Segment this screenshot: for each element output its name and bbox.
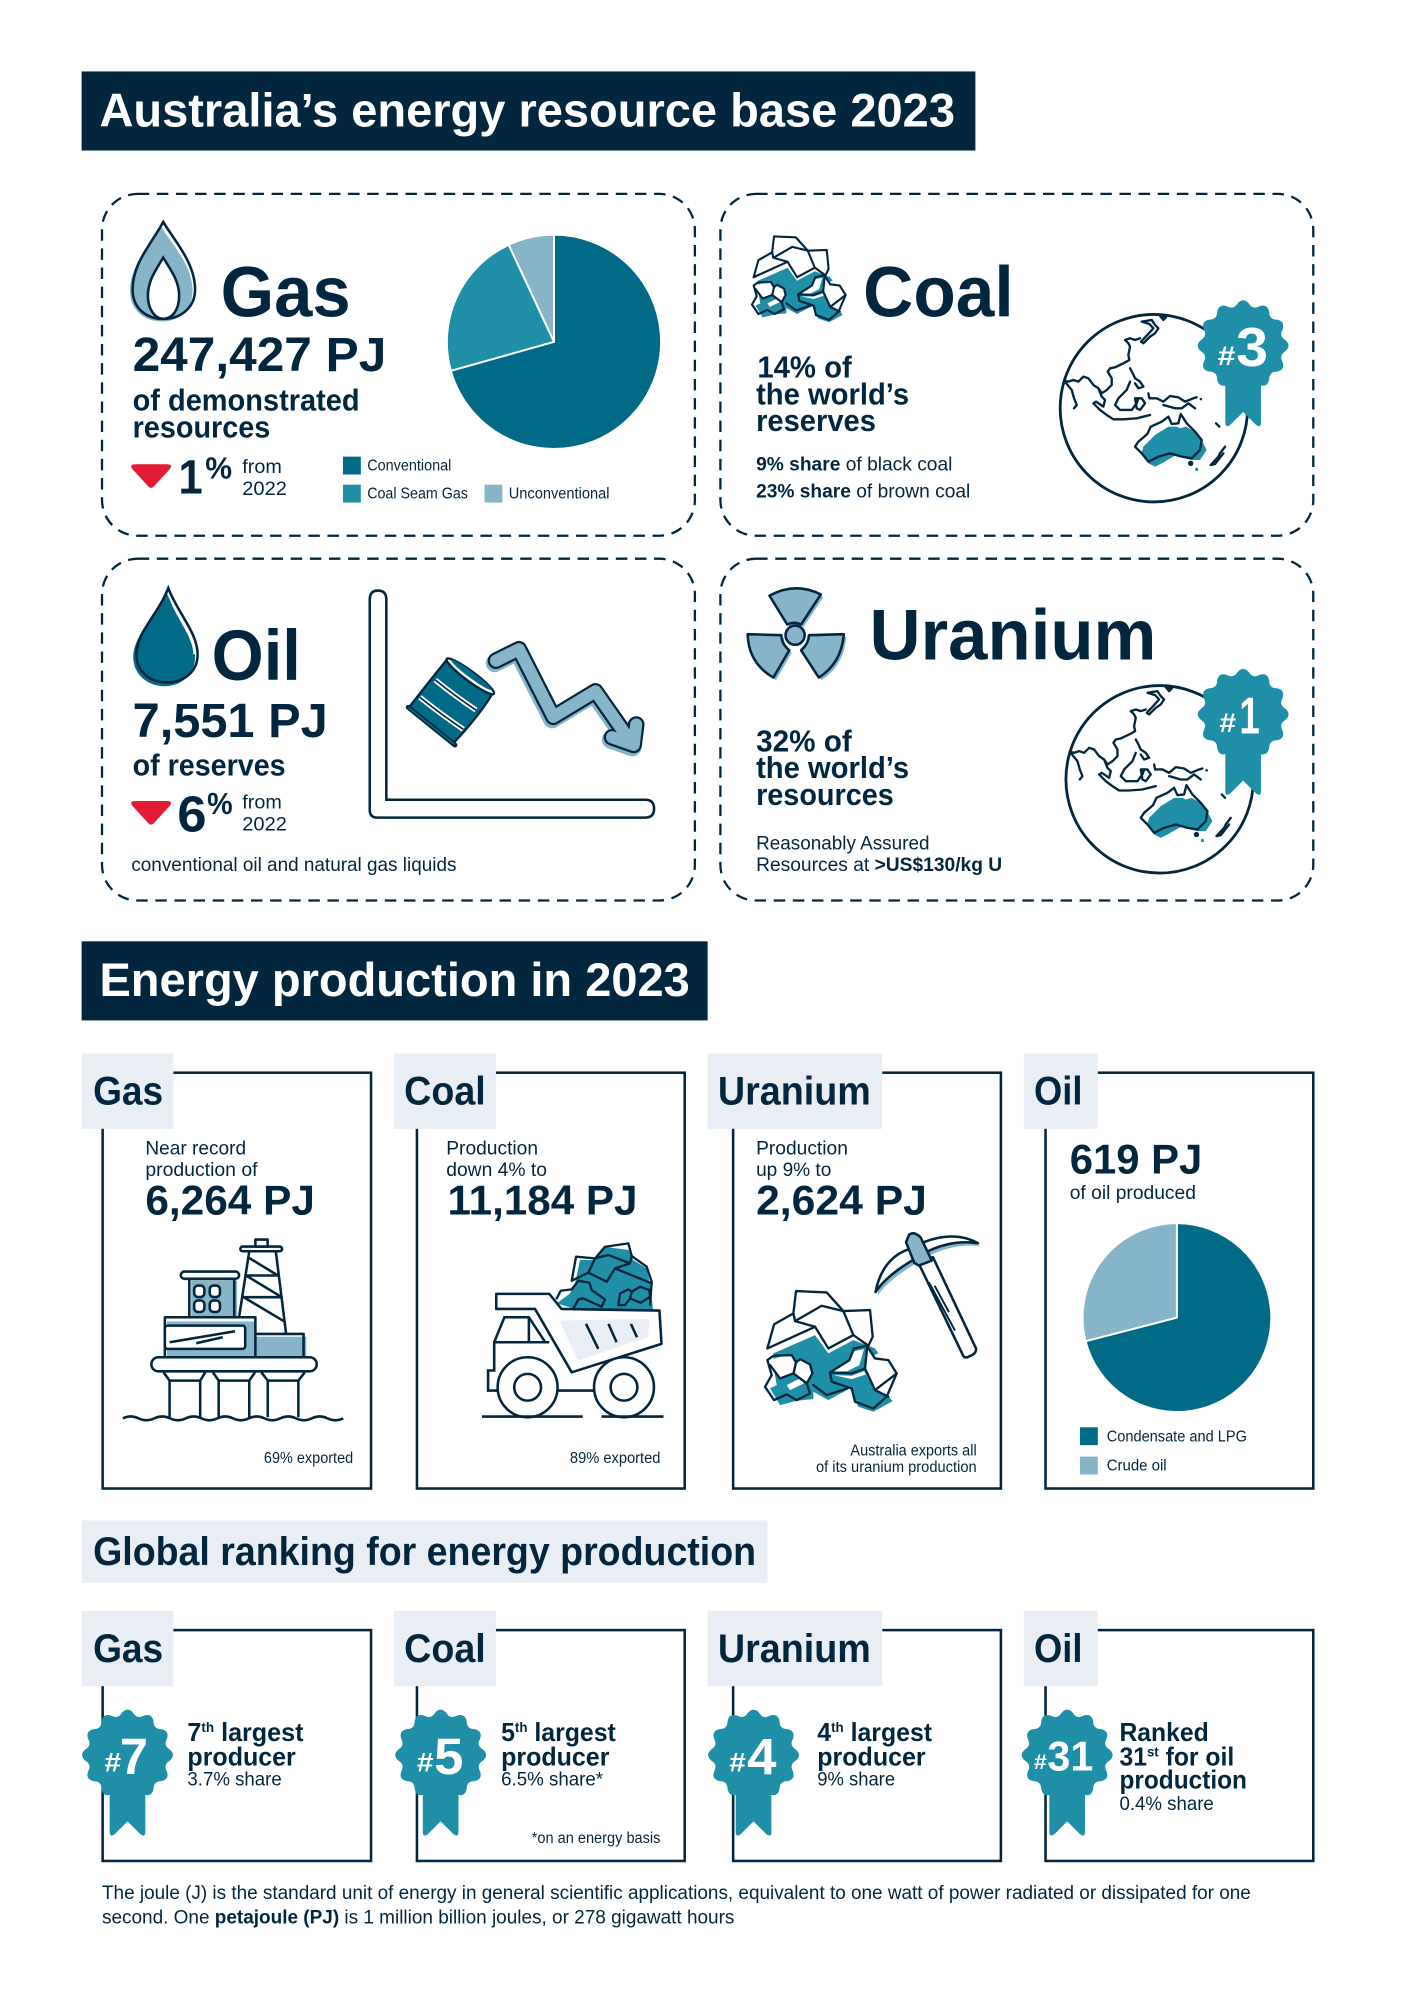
text: share of world resources: resources (756, 778, 894, 812)
chart: axes with falling arrow and barrel (370, 591, 654, 818)
text: reasonably assured resources: Resources at >US$130/kg U (756, 855, 1002, 876)
chart legend: Crude oil (1107, 1458, 1167, 1475)
tab: coal (394, 1054, 496, 1129)
text: gas rank: largest (214, 1717, 304, 1747)
text: production up 9 percent (756, 1137, 927, 1223)
text: share of world resources (756, 724, 909, 812)
text: exports note: Australia exports all (850, 1442, 977, 1459)
text: near record production: Near record (145, 1137, 246, 1159)
panel: gas ranking (82, 1611, 371, 1861)
text: uranium rank: producer (817, 1741, 926, 1771)
title: energy resource base (82, 71, 975, 151)
text: oil rank (1119, 1717, 1247, 1815)
badge: rank 3 (1198, 300, 1289, 426)
heading: global ranking (82, 1520, 768, 1583)
panel: gas production (82, 1054, 371, 1489)
stat: down 1 percent from 2022 (179, 451, 287, 505)
panel: oil ranking (1022, 1611, 1313, 1861)
badge: rank 31: 31 (1047, 1732, 1093, 1779)
text: of demonstrated resources: of demonstrated (133, 384, 360, 418)
stat: oil reserves: 7,551 PJ (133, 694, 328, 748)
chart legend: Conventional (367, 458, 451, 475)
text: exports note: of its uranium production (816, 1459, 977, 1476)
text: uranium rank (817, 1717, 932, 1791)
text: share of world reserves: reserves (756, 404, 876, 438)
text: uranium rank: 4 (817, 1717, 832, 1747)
chart legend (343, 457, 609, 503)
text: joule definition footnote (102, 1882, 1251, 1928)
text: oil rank: 31 (1119, 1741, 1149, 1771)
badge: rank 5 (395, 1710, 486, 1836)
tab: gas: Gas (93, 1627, 163, 1671)
text: production down 4 percent: 11,184 PJ (448, 1176, 638, 1223)
text: coal rank: th (515, 1719, 527, 1735)
text: coal rank: 5 (501, 1717, 516, 1747)
text: production down 4 percent (446, 1137, 638, 1223)
panel: coal reserves (720, 194, 1313, 536)
text: joule definition footnote: second. One petajoule (PJ) is 1 million billion joules, or 278 gigawatt hours (102, 1906, 735, 1928)
panel: coal production (394, 1054, 685, 1489)
tab: uranium (708, 1611, 882, 1686)
icon: globe (1060, 314, 1248, 502)
stat: down 1 percent from 2022: 2022 (242, 478, 287, 500)
chart legend: Coal Seam Gas (367, 486, 468, 503)
title: energy resource base: Australia’s energy resource base 2023 (99, 83, 955, 136)
text: oil rank: Ranked (1119, 1717, 1209, 1747)
badge: rank 5: 5 (434, 1728, 463, 1785)
panel: oil reserves (102, 559, 695, 901)
text: oil rank: production (1119, 1764, 1247, 1794)
text: gas rank: 3.7% share (187, 1769, 282, 1791)
pie chart: oil production (1083, 1223, 1271, 1412)
icon: oil drop (133, 588, 198, 686)
heading: oil: Oil (212, 616, 301, 696)
text: oil produced: 619 PJ (1070, 1135, 1202, 1182)
stat: down 6 percent from 2022: from (242, 792, 282, 814)
chart legend: Unconventional (509, 486, 609, 503)
panel: uranium ranking (708, 1611, 1001, 1861)
chart legend: Condensate and LPG (1107, 1428, 1247, 1445)
panel: coal ranking (394, 1611, 685, 1861)
tab: uranium (708, 1054, 882, 1129)
text: of demonstrated resources: resources (133, 410, 270, 445)
text: share of world reserves: 14% of (757, 351, 852, 385)
text: 69 percent exported: 69% exported (264, 1450, 353, 1467)
icon: oil barrel (408, 655, 497, 745)
tab: oil: Oil (1034, 1070, 1082, 1114)
badge: rank 1: # (1220, 708, 1236, 738)
icon: red down arrow (131, 801, 171, 825)
tab: oil (1024, 1611, 1098, 1686)
tab: gas (82, 1054, 173, 1129)
text: production up 9 percent: up 9% to (756, 1159, 831, 1181)
heading: global ranking: Global ranking for energy production (93, 1530, 756, 1574)
badge: rank 1: 1 (1239, 687, 1260, 745)
text: reasonably assured resources: Reasonably Assured (756, 833, 929, 854)
text: coal rank: 6.5% share* (501, 1769, 603, 1791)
badge: rank 3: 3 (1236, 316, 1268, 378)
arrow: falling trend (495, 649, 636, 747)
title: energy production: Energy production in 2023 (99, 953, 690, 1006)
text: production down 4 percent: Production (446, 1137, 538, 1159)
text: near record production: 6,264 PJ (145, 1176, 315, 1223)
text: share of world resources: the world’s (756, 751, 909, 785)
badge: rank 7 (82, 1710, 173, 1836)
badge: rank 1 (1198, 669, 1289, 795)
text: joule definition footnote: The joule (J) is the standard unit of energy in general scientific applications, equivalent to one watt of power radiated or dissipated for one (102, 1882, 1251, 1904)
text: uranium rank: largest (844, 1717, 932, 1747)
tab: uranium: Uranium (718, 1627, 871, 1671)
badge: rank 7: # (105, 1748, 121, 1778)
panel: gas resources (102, 194, 695, 536)
chart legend (1080, 1427, 1247, 1475)
badge: rank 5: # (417, 1748, 434, 1778)
badge: rank 4: 4 (747, 1728, 777, 1785)
pie chart: gas resources (447, 235, 661, 449)
text: oil rank: 0.4% share (1119, 1793, 1214, 1815)
stat: down 1 percent from 2022: from (242, 456, 282, 478)
text: black and brown coal share: 23% share of brown coal (756, 480, 970, 502)
text: gas rank: producer (187, 1741, 296, 1771)
heading: uranium: Uranium (870, 595, 1156, 675)
tab: coal: Coal (404, 1070, 486, 1114)
icon: offshore gas platform (123, 1240, 343, 1420)
text: of reserves: of reserves (133, 749, 286, 783)
text: 89 percent exported: 89% exported (570, 1450, 660, 1467)
badge: rank 4: # (729, 1748, 746, 1778)
title: energy production (82, 941, 708, 1020)
badge: rank 7: 7 (120, 1728, 148, 1785)
icon: coal dump truck (482, 1243, 664, 1417)
badge: rank 31: # (1034, 1749, 1047, 1774)
text: share of world resources: 32% of (756, 724, 853, 758)
stat: down 6 percent from 2022 (177, 786, 287, 843)
icon: red down arrow (131, 464, 171, 488)
text: oil produced: of oil produced (1070, 1182, 1196, 1204)
panel: uranium resources (720, 559, 1313, 901)
text: black and brown coal share (756, 454, 970, 502)
icon: globe (1066, 686, 1253, 873)
badge: rank 3: # (1218, 341, 1236, 371)
text: production up 9 percent: Production (756, 1137, 848, 1159)
icon: gas flame (130, 222, 195, 321)
text: of demonstrated resources (133, 384, 360, 445)
icon: pickaxe (876, 1233, 980, 1357)
text: oil rank: st (1147, 1743, 1159, 1759)
badge: rank 4 (708, 1710, 799, 1836)
text: near record production: production of (145, 1159, 258, 1181)
icon: uranium rocks (765, 1291, 897, 1412)
heading: gas: Gas (221, 252, 351, 332)
tab: oil: Oil (1034, 1627, 1082, 1671)
stat: down 6 percent from 2022: 6 (177, 786, 207, 843)
badge: rank 31 (1022, 1710, 1113, 1836)
stat: down 1 percent from 2022: 1 (179, 451, 203, 505)
text: gas rank: th (201, 1719, 214, 1735)
text: coal rank (501, 1717, 616, 1791)
text: uranium rank: 9% share (817, 1769, 895, 1791)
panel: oil production (1024, 1054, 1313, 1489)
text: coal rank: producer (501, 1741, 609, 1771)
stat: gas resources: 247,427 PJ (133, 328, 386, 382)
tab: oil (1024, 1054, 1098, 1129)
text: uranium rank: th (831, 1719, 844, 1735)
text: production up 9 percent: 2,624 PJ (756, 1176, 927, 1223)
tab: uranium: Uranium (718, 1070, 871, 1114)
text: reasonably assured resources (756, 833, 1002, 876)
tab: gas: Gas (93, 1070, 163, 1114)
text: gas rank (187, 1717, 304, 1791)
tab: coal: Coal (404, 1627, 486, 1671)
icon: radiation symbol (748, 588, 846, 680)
text: coal rank: largest (527, 1717, 616, 1747)
text: near record production (145, 1137, 315, 1223)
text: oil produced (1070, 1135, 1202, 1204)
heading: coal: Coal (863, 252, 1014, 332)
panel: uranium production (708, 1054, 1001, 1489)
stat: down 6 percent from 2022: % (207, 787, 233, 821)
stat: down 6 percent from 2022: 2022 (242, 813, 287, 835)
tab: gas (82, 1611, 173, 1686)
text: oil rank: for oil (1159, 1741, 1234, 1771)
text: share of world reserves: the world’s (756, 377, 909, 411)
text: share of world reserves (756, 351, 909, 438)
text: conventional oil and natural gas liquids: conventional oil and natural gas liquids (131, 854, 457, 876)
text: gas rank: 7 (187, 1717, 202, 1747)
icon: coal rocks (752, 236, 846, 322)
text: production down 4 percent: down 4% to (446, 1159, 547, 1181)
tab: coal (394, 1611, 496, 1686)
text: black and brown coal share: 9% share of black coal (756, 454, 952, 476)
text: exports note (816, 1442, 977, 1476)
text: energy basis footnote: *on an energy basis (532, 1830, 661, 1847)
stat: down 1 percent from 2022: % (205, 451, 232, 485)
